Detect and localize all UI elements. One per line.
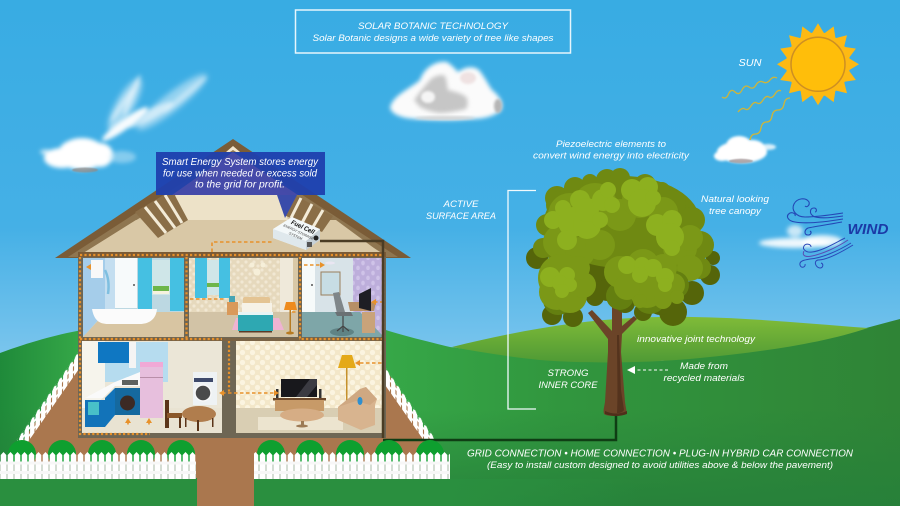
label: connections xyxy=(467,448,853,471)
roof xyxy=(55,139,411,258)
fuel cell box: Fuel Cell xyxy=(290,219,316,236)
fuel cell box: ENERGY STORAGE xyxy=(283,223,315,241)
front fences xyxy=(0,452,450,479)
callout: smart energy system: Smart Energy System stores energy xyxy=(162,157,319,168)
label: wind: WIND xyxy=(848,222,889,238)
bracket: active surface area xyxy=(508,190,536,409)
label: made from recycled materials: Made from xyxy=(680,361,728,372)
room: living room xyxy=(236,341,382,433)
label: piezoelectric: Piezoelectric elements to xyxy=(556,139,666,150)
room: office xyxy=(302,258,382,337)
label: natural looking tree canopy xyxy=(701,194,770,217)
label: sun: SUN xyxy=(738,57,762,69)
roof rafters xyxy=(135,190,333,238)
cloud: left wispy xyxy=(40,68,212,172)
label: strong inner core: STRONG xyxy=(548,368,588,379)
room: kitchen xyxy=(82,341,222,433)
callout: smart energy system: for use when needed or excess sold xyxy=(163,168,317,180)
label: piezoelectric xyxy=(533,139,690,162)
side fences xyxy=(17,351,435,458)
house xyxy=(55,139,411,438)
label: natural looking tree canopy: Natural looking xyxy=(701,194,770,205)
cloud: near wind xyxy=(759,225,842,248)
label: active surface area: SURFACE AREA xyxy=(426,211,496,222)
label: made from recycled materials: recycled materials xyxy=(664,373,745,384)
wind icon: lower gust xyxy=(800,238,853,268)
wind icon: upper gust xyxy=(788,199,843,235)
title box xyxy=(296,10,570,53)
underground cable to the tree xyxy=(383,412,616,440)
title box: Solar Botanic designs a wide variety of tree like shapes xyxy=(312,33,554,44)
hills xyxy=(0,317,900,506)
cloud: top centre xyxy=(390,62,502,120)
sun rays xyxy=(722,77,790,140)
room: bedroom xyxy=(189,258,298,337)
label: strong inner core: INNER CORE xyxy=(538,380,598,391)
tree canopy: lower clump mids xyxy=(538,249,685,313)
tree trunk xyxy=(588,295,637,416)
callout: smart energy system: to the grid for profit. xyxy=(195,180,285,190)
label: made from recycled materials xyxy=(664,361,745,384)
bushes xyxy=(8,440,444,468)
energy wiring dotted lines xyxy=(80,242,383,434)
arrow: recycled materials xyxy=(627,366,668,374)
label: connections: (Easy to install custom designed to avoid utilities above & below the pavement) xyxy=(487,460,833,471)
tree canopy: bright highlights xyxy=(540,177,684,298)
label: active surface area xyxy=(426,199,496,222)
power cable from fuel cell down to ground xyxy=(320,241,383,438)
tree canopy: lower clump shadows xyxy=(543,271,689,315)
title box: SOLAR BOTANIC TECHNOLOGY xyxy=(358,21,509,32)
flow arrowheads xyxy=(86,262,376,423)
label: strong inner core xyxy=(538,368,598,391)
label: natural looking tree canopy: tree canopy xyxy=(709,206,762,217)
house walls xyxy=(78,252,386,438)
tree canopy: outer mid leaves xyxy=(533,168,714,279)
sun xyxy=(777,23,859,105)
label: active surface area: ACTIVE xyxy=(442,199,479,210)
fuel cell box: SYSTEM xyxy=(288,231,303,241)
callout: smart energy system xyxy=(156,152,325,218)
label: connections: GRID CONNECTION • HOME CONNECTION • PLUG-IN HYBRID CAR CONNECTION xyxy=(467,448,853,460)
yard and garden path xyxy=(16,352,436,506)
label: piezoelectric: convert wind energy into electricity xyxy=(533,150,690,162)
cloud: near sun xyxy=(714,136,776,163)
tree canopy: dark outer leaves xyxy=(526,246,720,327)
room: bathroom xyxy=(83,258,184,337)
label: innovative joint technology: innovative joint technology xyxy=(637,334,756,345)
tree canopy: upper mid clumps xyxy=(543,182,703,281)
fuel cell box xyxy=(273,217,320,250)
tree xyxy=(526,168,720,416)
